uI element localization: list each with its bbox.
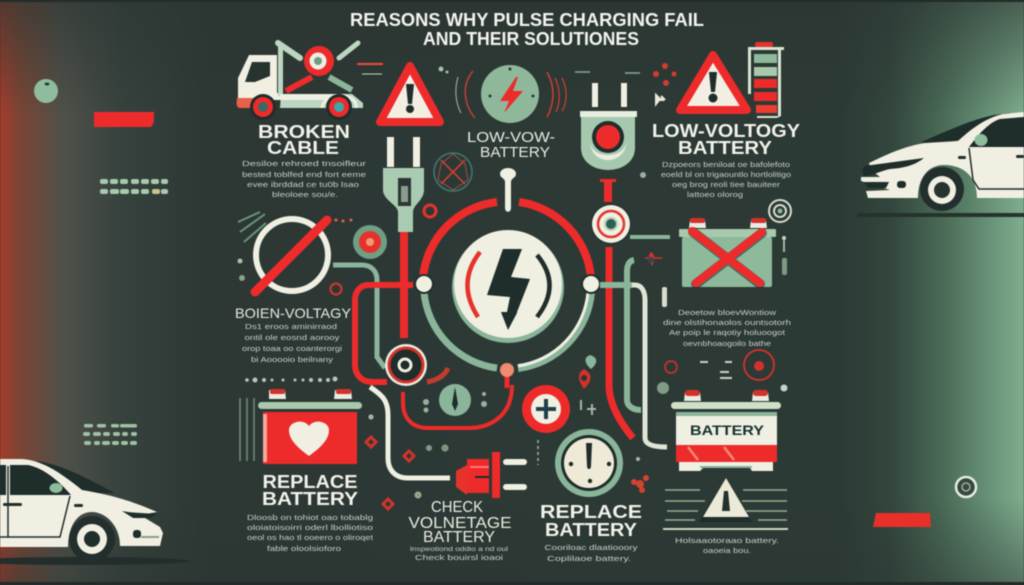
connector lines: left circuit: [333, 232, 448, 382]
heading: replace battery centre: REPLACE: [540, 502, 642, 522]
text: replace battery left description: fable oloolsioforo: [267, 544, 341, 553]
text: replace battery left description: oloiatoisoirri oderl lbolliotiso: [247, 523, 373, 532]
heading: check voltage battery: VOLNETAGE: [408, 515, 512, 532]
icon: tow truck: [237, 43, 363, 120]
icon: crossed network circle: [434, 153, 472, 191]
text: check battery description: [410, 547, 508, 562]
text: boien-voltagy description: ontil ole eosnd aorooy: [244, 333, 340, 342]
heading: broken cable: CABLE: [267, 138, 339, 158]
icon: battery level gauge: [748, 42, 784, 118]
icon: small dial: [423, 384, 487, 416]
heading: broken cable: [258, 122, 350, 158]
icon: green gauge with bolt: [456, 65, 566, 123]
heading: low-vow battery: LOW-VOW-: [467, 129, 555, 146]
text: low-voltogy description: [661, 160, 791, 199]
car: left: [0, 459, 190, 565]
text: boien-voltagy description: Ds1 eroos aminirraod: [245, 322, 337, 331]
icon: prohibited circle: [238, 212, 328, 292]
icon: battery labelled: [671, 390, 781, 471]
lightning bolt: [487, 249, 530, 330]
text: crossed battery description: oevnbhoaogoilo bathe: [683, 339, 771, 348]
small red nodes bottom: [366, 416, 447, 509]
text: replace battery left description: Dloosb on tohiot oao tobablg: [247, 513, 373, 522]
text: replace battery centre description: Coplilaoe battery.: [547, 554, 631, 563]
icon: small red node: [330, 205, 436, 294]
text: replace battery left description: oeol os hao tl ooeero o oliroqet: [247, 533, 374, 542]
small decoration right margin: [780, 236, 788, 392]
text: low-voltogy description: oeg brog reoli tiee bauiteer: [672, 180, 781, 189]
heading: boien-voltagy: BOIEN-VOLTAGY: [235, 305, 352, 321]
heading: low-vow battery: BATTERY: [480, 144, 550, 161]
icon: left ring node: [385, 344, 427, 386]
title: [350, 10, 704, 49]
heading: replace battery left: REPLACE: [262, 472, 358, 492]
text: replace battery centre description: [544, 543, 638, 563]
left side decorations: [34, 79, 168, 445]
title: AND THEIR SOLUTIONES: [423, 29, 639, 49]
heading: low-vow battery: [467, 129, 555, 161]
small marks near warning triangle: [357, 64, 448, 74]
heading: low-voltogy battery: [652, 121, 800, 158]
text: check battery description: lnspeotiond oddio a nd oul: [410, 547, 508, 553]
text: low-voltogy description: Dzpoeors beniloat oe bafolefoto: [662, 160, 790, 169]
right side decorations: [873, 477, 976, 527]
heading: replace battery centre: [540, 502, 642, 540]
title: REASONS WHY PULSE CHARGING FAIL: [350, 10, 704, 30]
text: broken cable description: bleoloee sou/e.: [272, 190, 338, 199]
text: low-voltogy description: lattoeo olorog: [687, 190, 743, 199]
icon: plus circle: [522, 385, 570, 433]
icon: clock gauge: [555, 429, 623, 497]
heading: replace battery left: BATTERY: [262, 489, 358, 509]
heading: low-voltogy battery: BATTERY: [678, 138, 772, 158]
icon: crossed battery: [679, 218, 776, 287]
bottom pin: [500, 363, 514, 377]
text: broken cable description: [242, 159, 367, 199]
heading: replace battery left: [262, 472, 358, 509]
icon: target node: [591, 204, 631, 244]
text: replace battery left description: [247, 513, 374, 553]
small target icon: [769, 200, 791, 222]
text: replace battery centre description: Cooriloac dlaatiooory: [544, 543, 638, 552]
icon: plug left: [383, 137, 424, 232]
text: check battery description: Check bouirsl ioaoi: [415, 553, 503, 562]
text: crossed battery description: dine olstihonaolos ountsotorh: [663, 318, 791, 327]
text: boien-voltagy description: bi Aooooio beilnany: [251, 355, 333, 364]
lower red u-shaped connector: [403, 370, 512, 428]
icon: warning triangle right: [680, 55, 747, 110]
text: small warning description: [675, 536, 779, 555]
small marks between plus and gauge: [538, 400, 649, 493]
text: broken cable description: evee ibrddad ce tu0b lsao: [247, 180, 359, 189]
battery label: BATTERY: [690, 422, 765, 438]
dotted row: [245, 376, 338, 382]
connector lines: right circuit: [600, 237, 670, 447]
heading: broken cable: BROKEN: [258, 122, 350, 142]
heading: low-voltogy battery: LOW-VOLTOGY: [652, 121, 800, 141]
icon: warning triangle left: [380, 66, 440, 122]
text: boien-voltagy description: [242, 322, 342, 364]
heading: check voltage battery: BATTERY: [423, 529, 495, 546]
small marks near plug: [575, 63, 676, 178]
icon: red battery with heart: [240, 389, 362, 464]
text: crossed battery description: [663, 308, 791, 348]
text: low-voltogy description: eoeld bl on trigaountlo hortlolitigo: [661, 170, 791, 179]
car: right: [857, 112, 1024, 217]
heading: replace battery centre: BATTERY: [545, 520, 637, 540]
icon: white cord with red plug: [370, 387, 527, 498]
small marks right circuit: [579, 252, 774, 394]
text: broken cable description: Desiloe rehroed tnsoifleur: [242, 159, 367, 168]
icon: plug centre-right: [580, 83, 637, 202]
top pin: [500, 168, 516, 212]
text: broken cable description: bested toblfed end fort eeme: [242, 170, 366, 179]
text: boien-voltagy description: orop toaa oo coanterorgi: [242, 344, 342, 353]
text: small warning description: Holsaaotoraao battery.: [675, 536, 779, 545]
central charging symbol: [414, 202, 601, 368]
text: small warning description: oaoeia bou.: [703, 546, 751, 555]
heading: check voltage battery: [408, 499, 512, 546]
icon: small warning triangle with lines: [663, 477, 788, 529]
heading: check voltage battery: CHECK: [431, 499, 484, 516]
text: crossed battery description: Ae poip le raqotiy holuoogot: [669, 328, 786, 337]
text: crossed battery description: Deoetow bloevWontiow: [678, 308, 777, 317]
